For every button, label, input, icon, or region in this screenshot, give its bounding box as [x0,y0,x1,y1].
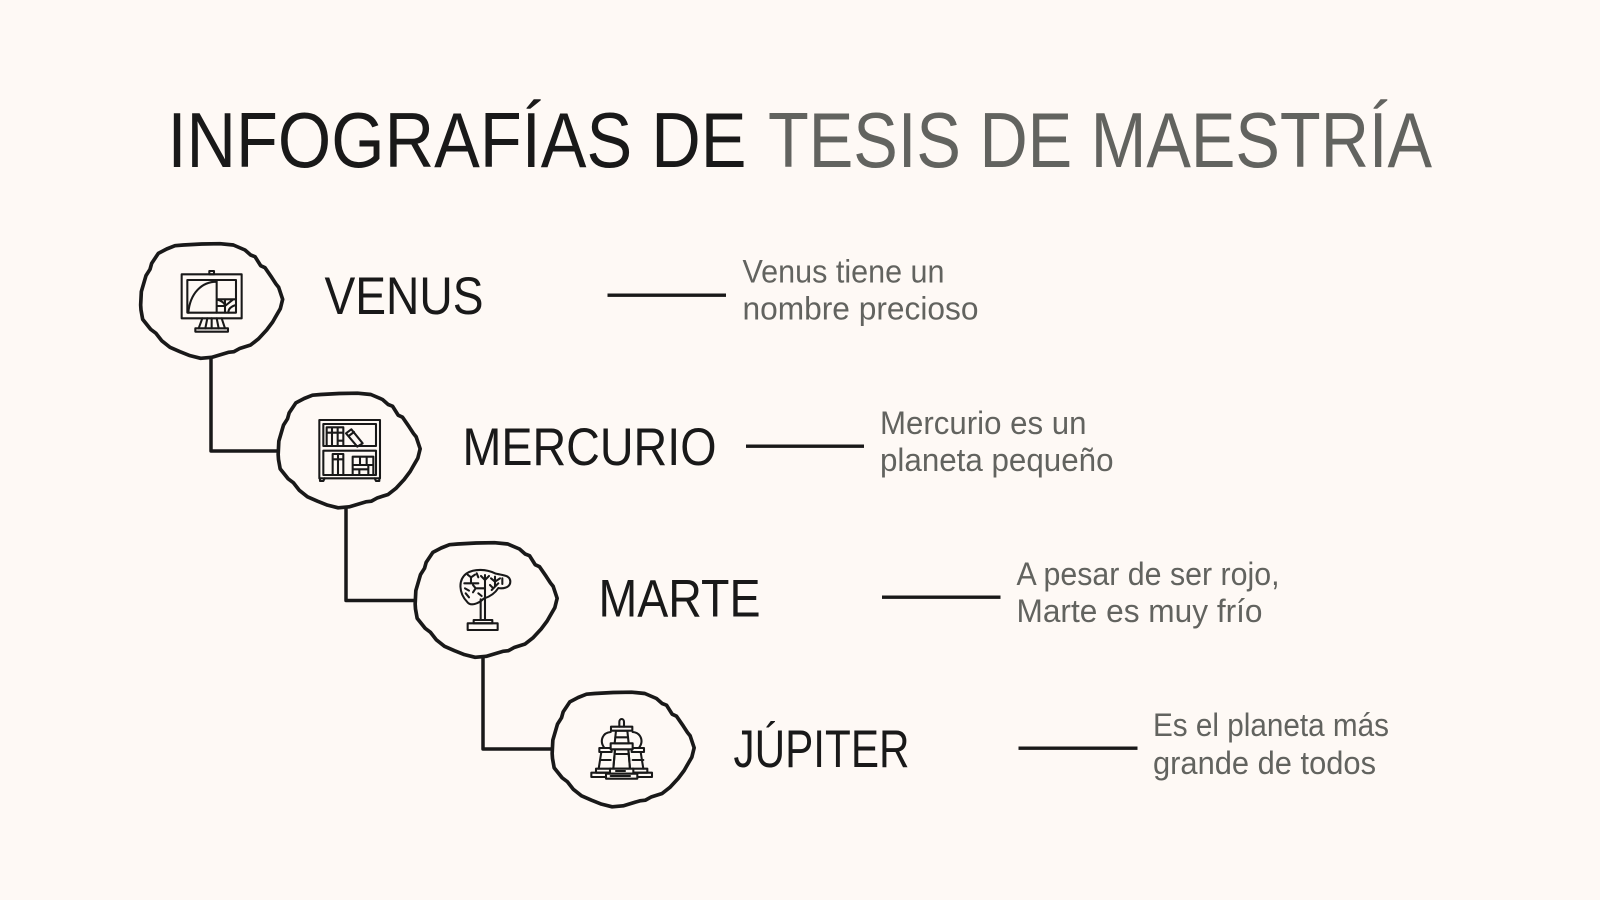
label: Venus: VENUS [324,267,484,326]
king: centre [606,719,637,779]
blob outline: Venus [141,244,283,358]
panel: Venus [141,244,979,358]
description: Mercurio [880,405,1114,478]
description: Venus: nombre precioso [742,290,978,326]
icon: easel with golden spiral [182,271,242,332]
description: Venus: Venus tiene un [742,254,944,290]
blob outline: Marte [415,543,557,657]
panel: Marte [415,543,1280,657]
description: Mercurio: Mercurio es un [880,405,1086,441]
line: Mercurio [746,444,864,448]
title [168,96,1432,184]
line: Júpiter [1018,746,1138,750]
panel: Júpiter [552,692,1389,807]
title: TESIS DE MAESTRÍA [768,96,1432,184]
icon: brain on a stand [460,570,510,630]
description: Marte: Marte es muy frío [1016,593,1262,629]
label: Marte: MARTE [598,570,760,628]
connector: Marte to Júpiter [483,657,554,749]
line: Venus [608,294,726,297]
pawns: left and right [591,732,652,777]
line: Marte [882,596,1000,599]
connector: Venus to Mercurio [211,358,280,451]
description: Marte [1016,556,1280,629]
description: Júpiter [1153,707,1389,781]
label: Mercurio: MERCURIO [462,418,716,477]
panel: Mercurio [278,393,1114,508]
description: Júpiter: grande de todos [1153,745,1376,781]
description: Mercurio: planeta pequeño [880,442,1114,478]
connector: Mercurio to Marte [346,508,417,600]
icon: chess pieces [591,719,652,779]
description: Marte: A pesar de ser rojo, [1016,556,1280,592]
blob outline: Mercurio [278,393,420,508]
description: Júpiter: Es el planeta más [1153,707,1389,743]
icon: bookshelf [319,420,380,481]
label: Júpiter: JÚPITER [734,720,910,779]
blob outline: Júpiter [552,692,694,807]
description: Venus [742,254,978,326]
title: INFOGRAFÍAS DE [168,96,746,184]
